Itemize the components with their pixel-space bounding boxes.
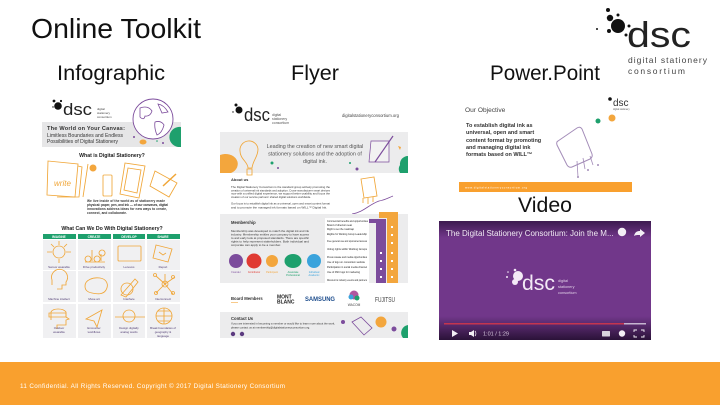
flyer membership: Founder <box>231 271 241 274</box>
flyer membership: Academic <box>309 274 320 277</box>
infographic sketches: write <box>54 179 71 188</box>
slide logo <box>608 97 630 111</box>
flyer board members: BLANC <box>277 300 295 306</box>
infographic logo: stationery <box>97 111 111 115</box>
video logo: dsc <box>522 272 555 295</box>
infographic grid: analog words <box>120 330 138 334</box>
infographic grid: Interconnect <box>155 297 171 301</box>
infographic grid: Interface <box>123 297 135 301</box>
infographic heading: What is Digital Stationery? <box>79 153 145 159</box>
video controls <box>452 330 644 338</box>
infographic grid: wearable <box>53 330 65 334</box>
flyer membership: rights to help represent stakeholders. Both individual and <box>231 240 309 244</box>
flyer membership: Right to set the roadmap <box>327 228 355 231</box>
infographic grid: workflows <box>88 330 101 334</box>
slide dots <box>596 114 616 124</box>
slide body text: formats based on WILL™ <box>466 152 532 158</box>
flyer membership: Contributor <box>248 271 260 274</box>
infographic grid: geography & <box>155 330 171 334</box>
flyer logo: dsc <box>244 105 270 125</box>
flyer membership: Voting rights within Working Groups <box>327 248 368 251</box>
flyer contact: please contact us at membership@digitalstationeryconsortium.org. <box>231 326 310 330</box>
flyer board members: Board Members <box>231 296 263 301</box>
flyer membership: Individual <box>309 271 320 274</box>
infographic grid: Sensor wearable <box>48 265 70 269</box>
flyer membership: Eligible for Working Group Leadership <box>327 233 368 236</box>
logo: dsc digital stationery consortium: dsc <box>627 14 691 55</box>
video progress bar <box>444 323 646 324</box>
slide logo: dsc <box>613 98 629 109</box>
flyer board members: WACOM <box>348 303 361 307</box>
slide body text: content format by promoting <box>466 138 541 144</box>
flyer board members: MONT <box>277 294 292 300</box>
infographic paragraph: innovations address ideas for new ways to create, <box>87 207 167 211</box>
video logo: consortium <box>558 291 577 295</box>
flyer about text: now with a unified digital experience, we support better usability and focus the <box>231 192 330 196</box>
flyer about text <box>231 177 330 210</box>
infographic grid: Break boundaries of <box>150 326 176 330</box>
slide orange bar <box>459 182 632 192</box>
flyer membership: corporate can apply to be a member. <box>231 243 281 247</box>
flyer contact: If you are interested in becoming a member or would like to learn more about the work, <box>231 322 335 326</box>
slide body text: universal, open and smart <box>466 130 534 136</box>
flyer membership: Participation in social media channel <box>327 266 367 269</box>
infographic grid: Muse art <box>88 297 100 301</box>
footer band <box>0 362 720 405</box>
slide heading: Our Objective <box>465 107 506 114</box>
footer band: 11 Confidential. All Rights Reserved. Copyright © 2017 Digital Stationery Consortium <box>20 382 285 390</box>
flyer membership: Board of directors seat <box>327 224 352 227</box>
title: Online Toolkit <box>31 13 201 44</box>
slide body text <box>466 123 541 158</box>
infographic banner: Possibilities of Digital Stationery <box>47 139 118 145</box>
infographic paragraph <box>87 199 168 215</box>
infographic grid: Report <box>159 265 168 269</box>
panel: infographic thumbnail <box>42 99 181 338</box>
infographic logo: consortium <box>97 115 112 119</box>
flyer logo: consortium <box>272 121 289 125</box>
flyer membership: Membership <box>231 220 256 225</box>
infographic grid: SHARE <box>157 235 169 239</box>
flyer membership: Commercial benefits and opportunities <box>327 220 369 223</box>
flyer board members: FUJITSU <box>375 297 395 304</box>
flyer membership: Participant <box>266 271 278 274</box>
infographic paragraph: We live inside of the world as of stationery made <box>87 199 165 203</box>
infographic grid: language <box>157 334 169 338</box>
flyer membership: Membership was developed to match the digital ink and ink <box>231 229 309 233</box>
flyer about text: creation of universal ink standards and adoption. Cross-manufacturer smart devices <box>231 188 330 192</box>
flyer banner: digital ink. <box>303 159 327 165</box>
infographic banner: The World on Your Canvas: <box>47 126 125 132</box>
flyer about text: creation of our service partners' shared digital solutions worldwide. <box>231 195 311 199</box>
infographic grid <box>43 234 180 338</box>
flyer logo: digital <box>272 113 281 117</box>
video controls: 1:01 / 1:29 <box>483 332 509 338</box>
flyer banner: Leading the creation of new smart digital <box>267 144 363 150</box>
video top icons <box>618 228 645 237</box>
infographic sketches <box>47 161 177 198</box>
flyer board members <box>231 290 395 307</box>
slide tablet sketch <box>557 127 599 178</box>
flyer about text: About us <box>231 177 249 182</box>
flyer logo: stationery <box>272 117 287 121</box>
infographic banner <box>42 99 181 147</box>
slide logo: digital stationery <box>613 108 630 111</box>
infographic grid: Encounter <box>87 326 101 330</box>
infographic logo <box>52 100 112 119</box>
flyer membership: Free general use and sponsored access <box>327 240 368 243</box>
flyer membership <box>220 212 408 283</box>
flyer membership: Discount to industry events and partners <box>327 279 368 282</box>
flyer membership: industry. Membership entitles your company to have access <box>231 232 309 236</box>
flyer membership: Press release and media opportunities <box>327 256 368 259</box>
infographic paragraph: connect, and collaborate. <box>87 211 127 215</box>
video logo: stationery <box>558 285 575 289</box>
flyer banner <box>220 132 408 175</box>
heading: Flyer: Flyer <box>291 62 339 85</box>
infographic grid: CREATE <box>88 235 100 239</box>
infographic grid: DEVELOP <box>121 235 137 239</box>
flyer contact: Contact Us <box>231 316 254 321</box>
logo: dsc digital stationery consortium: digital stationery <box>628 55 708 65</box>
video title: The Digital Stationery Consortium: Join the M... <box>446 229 614 238</box>
flyer about text: Our focus is to establish digital ink as a universal, open and smart content format <box>231 202 330 206</box>
infographic paragraph: physical: paper, pen, and ink — of our canvases, digital <box>87 203 168 207</box>
infographic grid: Design digitally <box>119 326 139 330</box>
flyer membership: Use of logo on consortium website <box>327 261 366 264</box>
infographic grid: IMAGINE <box>52 235 66 239</box>
flyer about text: and to promote the managed ink formats based on WILL™ Digital Ink. <box>231 206 327 210</box>
heading: PowerPoint: Power.Point <box>490 62 600 85</box>
flyer membership: Associate <box>288 271 299 274</box>
infographic banner: Limitless Boundaries and Endless <box>47 133 124 139</box>
infographic grid: Lenovos <box>124 265 135 269</box>
heading: Infographic: Infographic <box>57 62 165 85</box>
flyer contact <box>220 312 408 338</box>
flyer membership: Professional <box>286 274 300 277</box>
panel: flyer thumbnail <box>220 104 408 338</box>
infographic grid: Drive productivity <box>83 265 106 269</box>
flyer tablet sketch <box>352 177 393 214</box>
logo: dsc digital stationery consortium: consortium <box>628 66 685 76</box>
infographic grid heading: What Can We Do With Digital Stationery? <box>61 226 163 232</box>
panel: video thumbnail <box>439 221 651 340</box>
heading: Video: Video <box>518 194 572 217</box>
slide body text: and managing digital ink <box>466 145 531 151</box>
flyer about text: The Digital Stationery Consortium is the standard group actively promoting the <box>231 185 330 189</box>
panel: PowerPoint thumbnail <box>459 97 632 192</box>
infographic grid: Machine intellect <box>48 297 70 301</box>
infographic grid: Outdoor <box>54 326 64 330</box>
flyer logo <box>232 104 289 125</box>
slide body text: To establish digital ink as <box>466 123 533 129</box>
infographic logo: dsc <box>63 100 93 119</box>
video logo: digital <box>558 279 568 283</box>
flyer membership: to and early look at proposed standards. There are specific <box>231 236 309 240</box>
infographic logo: digital <box>97 107 105 111</box>
video logo <box>506 269 577 295</box>
flyer URL: digitalstationeryconsortium.org <box>342 113 400 118</box>
slide orange bar: www.digitalstationeryconsortium.org <box>465 186 527 190</box>
logo: dsc digital stationery consortium <box>596 8 708 76</box>
flyer membership: Use of DSC logo for marketing <box>327 271 361 274</box>
flyer board members: SAMSUNG <box>305 296 335 303</box>
flyer banner: stationery solutions and the adoption of <box>268 152 362 158</box>
